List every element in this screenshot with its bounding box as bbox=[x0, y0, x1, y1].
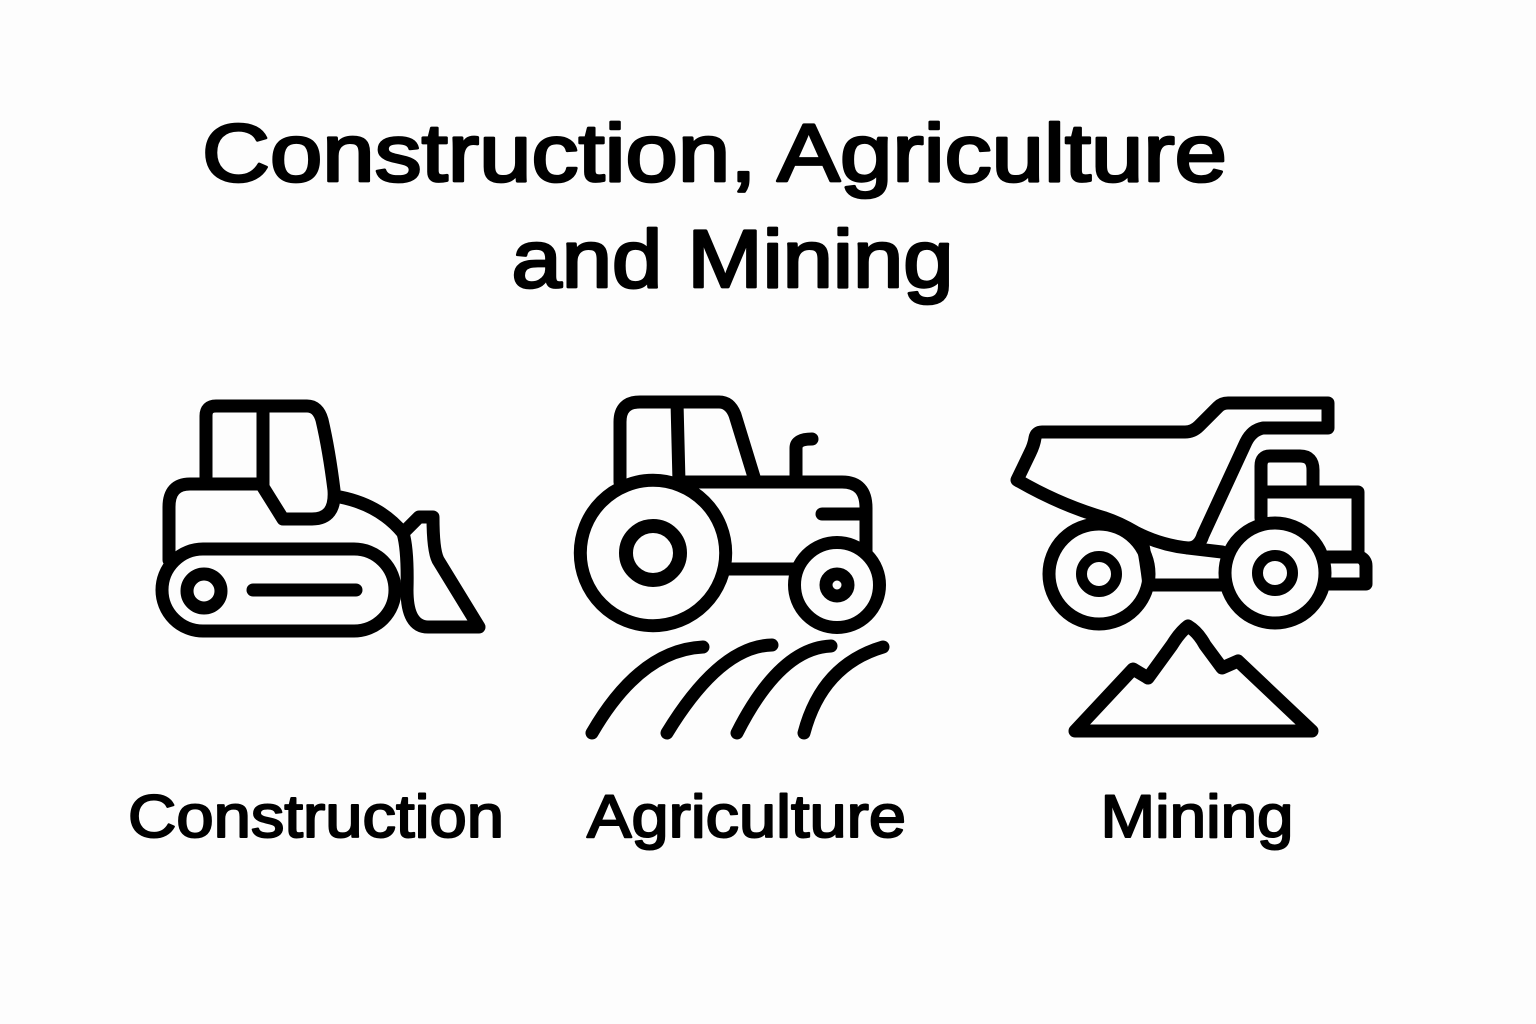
icon: mining dump truck bbox=[1017, 403, 1366, 731]
title: and Mining bbox=[512, 214, 954, 305]
icon: tractor bbox=[580, 402, 883, 733]
label: Construction: Construction bbox=[128, 783, 504, 850]
title: Construction, Agriculture bbox=[202, 108, 1227, 199]
label: Mining: Mining bbox=[1100, 783, 1294, 850]
icon: bulldozer bbox=[162, 406, 479, 631]
title bbox=[202, 108, 1227, 305]
label: Agriculture: Agriculture bbox=[587, 783, 906, 850]
